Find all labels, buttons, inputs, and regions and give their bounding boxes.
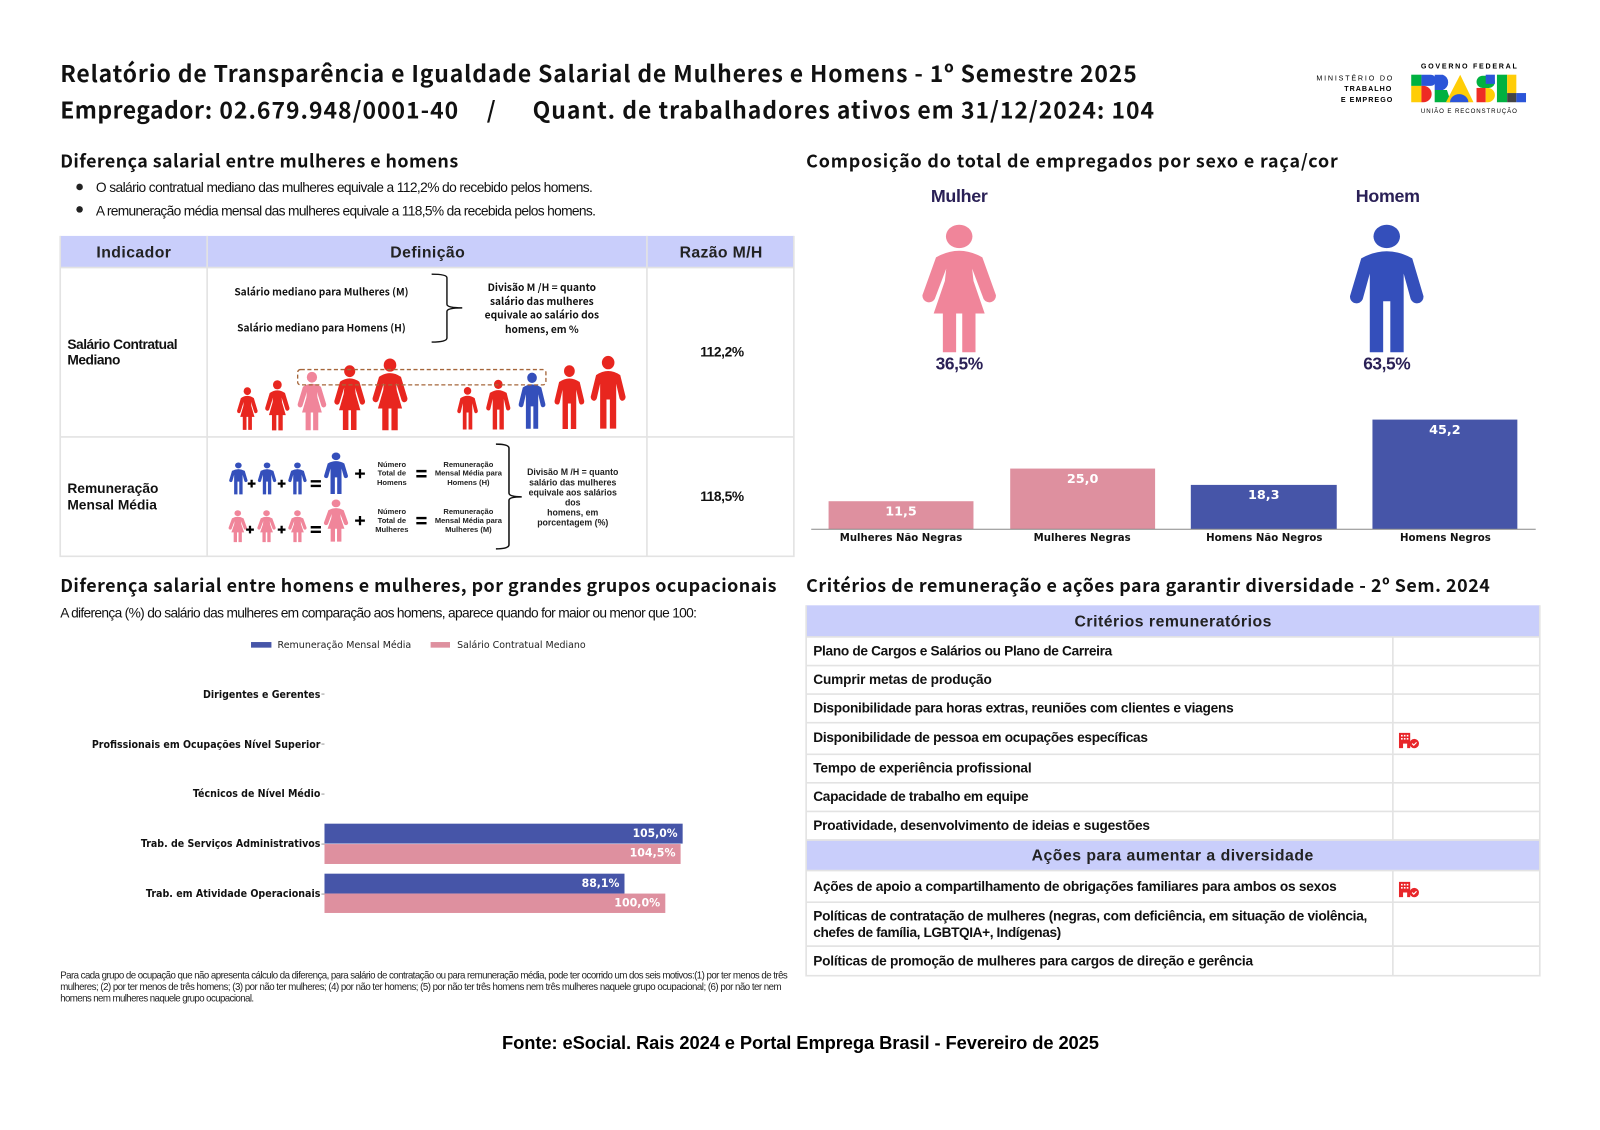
rows: Proatividade, desenvolvimento de ideias e sugestões xyxy=(813,818,1150,833)
panel: tabela de indicadores xyxy=(60,236,794,556)
bullet text block: A remuneração média mensal das mulheres equivale a 118,5% da recebida pelos homens. xyxy=(96,204,596,219)
definition: salário mediano: Salário mediano para Homens (H) xyxy=(237,319,406,334)
definition: remuneração média: Remuneração xyxy=(443,460,494,469)
definition: salário mediano: salário das mulheres xyxy=(490,293,594,308)
rows: Disponibilidade para horas extras, reuniões com clientes e viagens xyxy=(813,700,1234,715)
definition: remuneração média: Total de xyxy=(378,469,406,478)
bar chart: grupos ocupacionais: 104,5% xyxy=(630,845,676,859)
heading: grupos ocupacionais: Diferença salarial entre homens e mulheres, por grandes grupos ocupacionais xyxy=(60,572,777,598)
footnote xyxy=(60,970,788,1005)
rows: Disponibilidade de pessoa em ocupações específicas xyxy=(813,730,1148,745)
definition: salário mediano: homens, em % xyxy=(505,321,579,336)
panel: composição homem xyxy=(1350,186,1423,374)
logo: Ministério do Trabalho e Emprego / Governo Federal: MINISTÉRIO DO xyxy=(1316,73,1393,82)
title: Quant. de trabalhadores ativos em 31/12/2024: 104 xyxy=(533,92,1154,126)
panel: composição mulher: Mulher xyxy=(931,186,988,206)
bar chart: grupos ocupacionais: Profissionais em Ocupações Nível Superior xyxy=(92,739,321,751)
bullet text block xyxy=(76,180,596,219)
text: explicação: A diferença (%) do salário das mulheres em comparação aos homens, aparece quando for maior ou menor que 100: xyxy=(60,606,697,621)
title: 02.679.948/0001-40 xyxy=(219,92,458,126)
legend: Remuneração Mensal Média xyxy=(278,639,411,651)
row label: salário contratual: Salário Contratual xyxy=(67,337,178,352)
bar chart: sexo e raça/cor: 25,0 xyxy=(1067,472,1099,487)
definition: salário mediano xyxy=(234,274,599,342)
footnote: homens nem mulheres naquele grupo ocupacional. xyxy=(60,994,254,1005)
table header xyxy=(96,244,762,261)
bar chart: sexo e raça/cor xyxy=(811,420,1536,544)
footer source: Fonte: eSocial. Rais 2024 e Portal Emprega Brasil - Fevereiro de 2025 xyxy=(502,1032,1099,1053)
legend xyxy=(251,639,586,651)
bar chart: grupos ocupacionais: 88,1% xyxy=(582,876,620,890)
logo: Ministério do Trabalho e Emprego / Governo Federal: UNIÃO E RECONSTRUÇÃO xyxy=(1421,108,1517,115)
definition: salário mediano: equivale ao salário dos xyxy=(485,307,599,322)
table header: Razão M/H xyxy=(680,244,762,261)
definition: remuneração média: salário das mulheres xyxy=(529,478,616,488)
rows: Ações de apoio a compartilhamento de obrigações familiares para ambos os sexos xyxy=(813,879,1337,894)
definition: remuneração média: Mulheres (M) xyxy=(445,525,492,534)
definition: remuneração média: Divisão M /H = quanto xyxy=(527,467,619,477)
bar chart: grupos ocupacionais: 100,0% xyxy=(614,895,660,909)
heading: composição: Composição do total de empregados por sexo e raça/cor xyxy=(806,148,1338,174)
percent homem: 63,5% xyxy=(1363,354,1410,374)
definition: remuneração média: Mensal Média para xyxy=(435,516,503,525)
definition: remuneração média: Remuneração xyxy=(443,507,494,516)
row label: salário contratual xyxy=(67,337,178,367)
title xyxy=(60,55,1154,126)
title: Relatório de Transparência e Igualdade Salarial de Mulheres e Homens - 1º Semestre 2025 xyxy=(60,55,1137,89)
bullet text block: O salário contratual mediano das mulheres equivale a 112,2% do recebido pelos homens. xyxy=(96,180,593,195)
bar chart: grupos ocupacionais: 105,0% xyxy=(633,826,678,840)
definition: remuneração média: Total de xyxy=(378,516,406,525)
title: / xyxy=(487,92,496,126)
logo: Ministério do Trabalho e Emprego / Governo Federal: E EMPREGO xyxy=(1341,96,1393,104)
icon: empresa 2 xyxy=(1399,882,1419,897)
bar chart: grupos ocupacionais: Técnicos de Nível Médio xyxy=(193,788,320,800)
definition: remuneração média: dos xyxy=(565,498,581,508)
definition: remuneração média: Mensal Média para xyxy=(435,469,503,478)
heading: critérios: Critérios de remuneração e ações para garantir diversidade - 2º Sem. 2024 xyxy=(806,572,1490,598)
header: critérios remuneratórios: Critérios remuneratórios xyxy=(1074,614,1272,631)
definition: remuneração média: equivale aos salários xyxy=(529,488,617,498)
definition: remuneração média: Número xyxy=(378,507,406,516)
heading: diferença salarial: Diferença salarial entre mulheres e homens xyxy=(60,148,458,174)
rows: Capacidade de trabalho em equipe xyxy=(813,789,1029,804)
table header: Definição xyxy=(390,244,465,261)
bar chart: sexo e raça/cor: Mulheres Não Negras xyxy=(840,532,962,544)
row label: remuneração: Remuneração xyxy=(67,481,158,496)
panel: composição homem: Homem xyxy=(1356,186,1420,206)
logo: Ministério do Trabalho e Emprego / Governo Federal: GOVERNO FEDERAL xyxy=(1421,63,1517,71)
bar chart: grupos ocupacionais: Trab. de Serviços Administrativos xyxy=(141,838,320,850)
logo: Ministério do Trabalho e Emprego / Governo Federal xyxy=(1316,63,1526,115)
legend: Salário Contratual Mediano xyxy=(457,639,586,651)
panel: tabela de critérios xyxy=(806,605,1540,976)
bar chart: sexo e raça/cor: Homens Negros xyxy=(1400,532,1491,544)
logo: Ministério do Trabalho e Emprego / Governo Federal: TRABALHO xyxy=(1344,85,1392,93)
bar chart: grupos ocupacionais: Dirigentes e Gerentes xyxy=(203,689,320,701)
header: ações: Ações para aumentar a diversidade xyxy=(1032,847,1313,864)
row label: salário contratual: Mediano xyxy=(67,352,120,367)
definition: remuneração média: Mulheres xyxy=(375,525,408,534)
bar chart: grupos ocupacionais xyxy=(92,689,683,913)
row label: remuneração: Mensal Média xyxy=(67,497,157,512)
definition: remuneração média: homens, em xyxy=(547,508,599,518)
icons: pessoas ordenadas (mediana) xyxy=(237,356,626,430)
icon: homem xyxy=(1350,225,1423,352)
value: 118,5%: 118,5% xyxy=(700,489,744,504)
icon: mulher xyxy=(922,225,996,352)
footnote: Para cada grupo de ocupação que não apresenta cálculo da diferença, para salário de contratação ou para remuneração média, pode ter ocorrido um dos seis motivos:(1) por ter menos de três xyxy=(60,970,788,981)
rows xyxy=(813,643,1367,969)
bar chart: sexo e raça/cor: 18,3 xyxy=(1248,488,1280,503)
bar chart: sexo e raça/cor: 11,5 xyxy=(885,505,917,520)
percent mulher: 36,5% xyxy=(936,354,983,374)
rows: Cumprir metas de produção xyxy=(813,672,992,687)
icon: empresa 1 xyxy=(1399,733,1419,748)
definition: remuneração média: Número xyxy=(378,460,406,469)
title: Empregador: xyxy=(60,92,212,126)
rows: Políticas de contratação de mulheres (negras, com deficiência, em situação de violência, xyxy=(813,909,1367,924)
value: 112,2%: 112,2% xyxy=(700,344,744,359)
bar chart: sexo e raça/cor: 45,2 xyxy=(1429,423,1461,438)
footnote: mulheres; (2) por ter menos de três homens; (3) por não ter mulheres; (4) por não ter homens; (5) por não ter três homens nem três mulheres naquele grupo ocupacional; (6) por não ter nem xyxy=(60,982,782,993)
definition: remuneração média: porcentagem (%) xyxy=(537,518,608,528)
table header: Indicador xyxy=(96,244,171,261)
definition: remuneração média: Homens xyxy=(377,478,407,487)
bar chart: grupos ocupacionais: Trab. em Atividade Operacionais xyxy=(146,888,320,900)
definition: remuneração média xyxy=(229,444,619,549)
rows: Políticas de promoção de mulheres para cargos de direção e gerência xyxy=(813,954,1253,969)
rows: Plano de Cargos e Salários ou Plano de Carreira xyxy=(813,643,1113,658)
definition: salário mediano: Salário mediano para Mulheres (M) xyxy=(234,284,409,299)
panel: composição mulher xyxy=(922,186,996,374)
definition: salário mediano: Divisão M /H = quanto xyxy=(488,279,596,294)
bar chart: sexo e raça/cor: Homens Não Negros xyxy=(1206,532,1322,544)
definition: remuneração média: Homens (H) xyxy=(447,478,490,487)
bar chart: sexo e raça/cor: Mulheres Negras xyxy=(1034,532,1131,544)
rows: chefes de família, LGBTQIA+, Indígenas) xyxy=(813,925,1061,940)
rows: Tempo de experiência profissional xyxy=(813,761,1032,776)
